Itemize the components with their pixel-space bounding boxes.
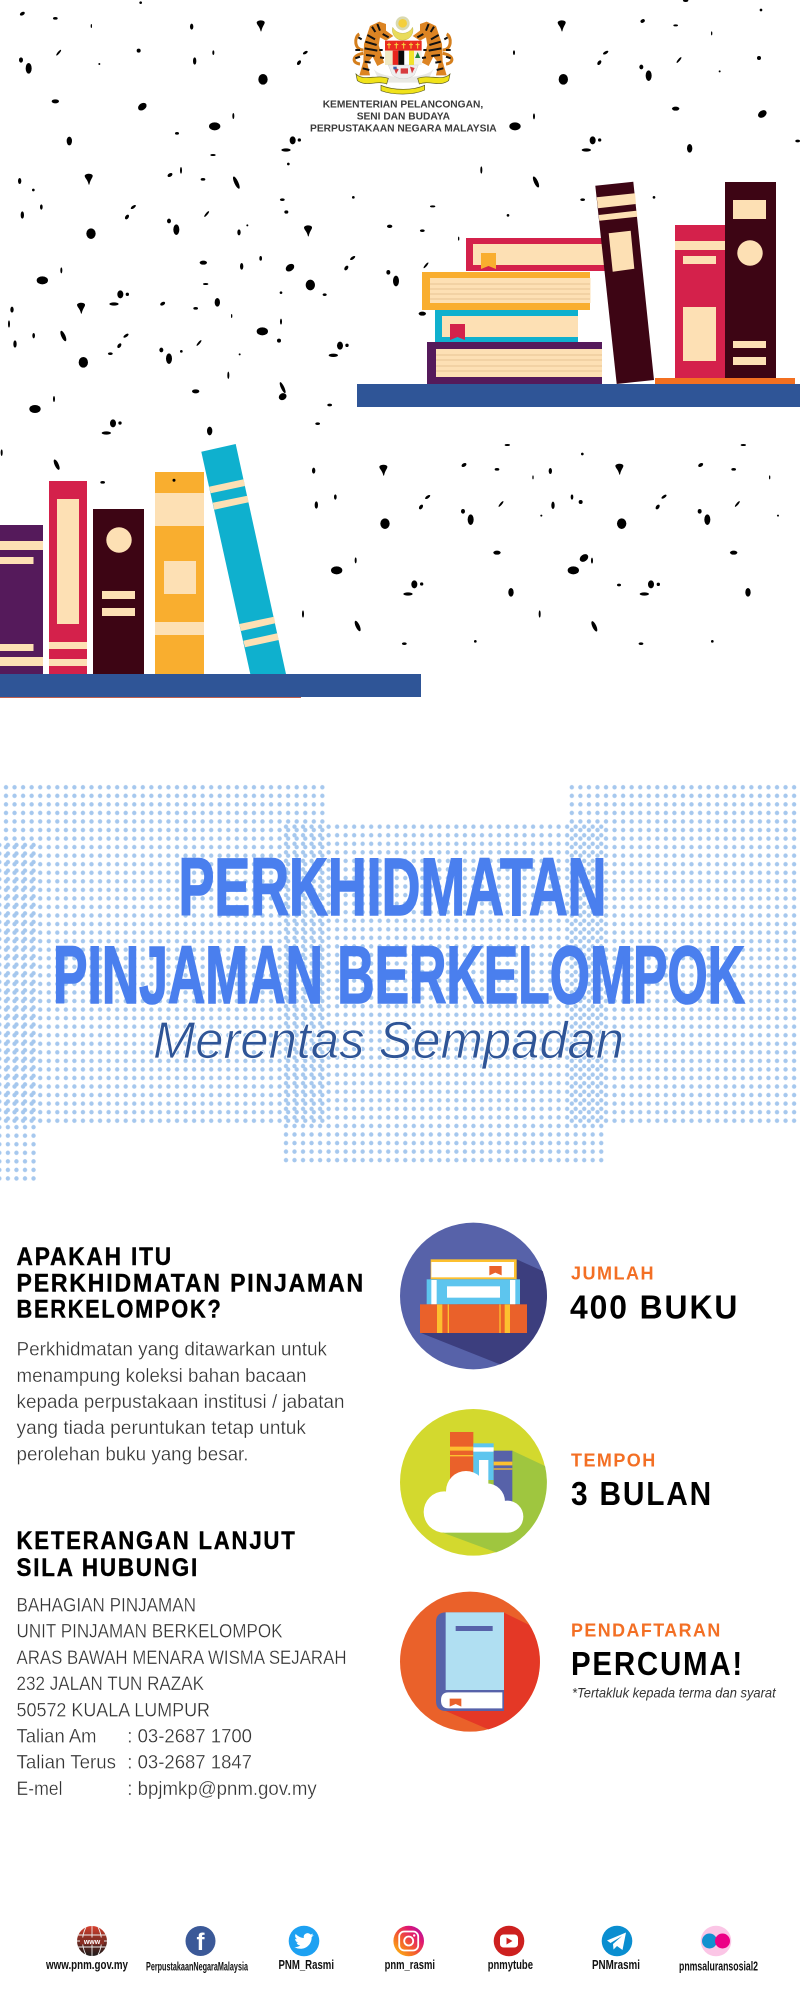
- text block: contact details: Talian Terus: [16, 1752, 116, 1774]
- heading: what is the service: PERKHIDMATAN PINJAMAN: [16, 1270, 365, 1298]
- label: twitter: PNM_Rasmi: [278, 1958, 334, 1972]
- book: pink horizontal: [466, 238, 606, 271]
- book: teal tilted: [201, 444, 286, 674]
- logo: Malaysian coat of arms: [354, 16, 452, 94]
- text block: contact details: : 03-2687 1847: [127, 1752, 252, 1774]
- panel: dotted world-map backdrop: [0, 783, 800, 1182]
- text block: contact details: : bpjmkp@pnm.gov.my: [127, 1778, 317, 1800]
- label: telegram: PNMrasmi: [592, 1958, 640, 1972]
- book: teal horizontal: [435, 310, 578, 343]
- text block: contact details: E-mel: [16, 1778, 62, 1800]
- icon: cloud books circle: [400, 1409, 547, 1556]
- icon: book stack circle: [400, 1223, 547, 1369]
- logo: motto ribbon: [356, 74, 450, 94]
- book: dark upright: [725, 182, 776, 378]
- label: facebook: PerpustakaanNegaraMalaysia: [146, 1960, 248, 1974]
- illustration: bottom-left bookshelf: [0, 444, 421, 698]
- stat: registration free: *Tertakluk kepada terma dan syarat: [572, 1685, 777, 1701]
- logo caption: ministry and library: PERPUSTAKAAN NEGARA MALAYSIA: [310, 124, 497, 135]
- icon: single book circle: [400, 1592, 540, 1732]
- logo: right tiger: [413, 22, 452, 75]
- book: dark tilted: [595, 182, 654, 384]
- text block: contact details: ARAS BAWAH MENARA WISMA SEJARAH: [16, 1647, 346, 1669]
- book: purple horizontal: [427, 342, 602, 384]
- text block: contact details: BAHAGIAN PINJAMAN: [16, 1594, 196, 1616]
- text block: service description: menampung koleksi bahan bacaan: [16, 1365, 306, 1387]
- icon: youtube: [494, 1926, 524, 1956]
- title: [53, 842, 745, 1021]
- stat: total books: 400 BUKU: [570, 1289, 739, 1326]
- stat: registration free: PERCUMA!: [571, 1645, 744, 1682]
- heading: what is the service: APAKAH ITU: [16, 1243, 173, 1271]
- stat: total books: [570, 1262, 739, 1326]
- text block: contact details: Talian Am: [16, 1726, 96, 1748]
- heading: further information: KETERANGAN LANJUT: [16, 1527, 296, 1555]
- subtitle: Merentas Sempadan: [153, 1012, 624, 1070]
- logo caption: ministry and library: SENI DAN BUDAYA: [357, 112, 450, 123]
- stat: total books: JUMLAH: [571, 1262, 655, 1283]
- label: instagram: pnm_rasmi: [385, 1958, 435, 1972]
- heading: what is the service: BERKELOMPOK?: [16, 1296, 222, 1324]
- shelf: [0, 674, 421, 697]
- icon: twitter: [289, 1926, 319, 1956]
- text block: service description: [16, 1338, 344, 1466]
- book: yellow horizontal: [422, 272, 590, 310]
- logo crest: crescent and star: [392, 16, 413, 40]
- text block: service description: kepada perpustakaan institusi / jabatan: [16, 1391, 344, 1413]
- heading: further information: SILA HUBUNGI: [16, 1554, 199, 1582]
- stat: registration free: PENDAFTARAN: [571, 1620, 722, 1641]
- icon: website globe: [77, 1926, 107, 1956]
- stat: loan period: TEMPOH: [571, 1450, 657, 1471]
- icon: facebook: [186, 1926, 216, 1956]
- stat: loan period: 3 BULAN: [571, 1475, 713, 1512]
- icon: website globe: www: [83, 1939, 101, 1946]
- logo: shield: [373, 41, 434, 83]
- orange base: [655, 378, 795, 384]
- book: orange upright: [155, 472, 204, 674]
- footer: social links: [45, 1926, 758, 1974]
- logo caption: ministry and library: KEMENTERIAN PELANCONGAN,: [323, 100, 483, 111]
- logo: left tiger: [354, 22, 393, 75]
- text block: contact details: : 03-2687 1700: [127, 1726, 252, 1748]
- text block: contact details: UNIT PINJAMAN BERKELOMPOK: [16, 1620, 282, 1642]
- label: flickr: pnmsaluransosial2: [679, 1960, 758, 1974]
- icon: telegram: [602, 1926, 632, 1956]
- ink splatter pattern: [1, 0, 800, 645]
- text block: contact details: [16, 1594, 346, 1800]
- label: website: www.pnm.gov.my: [45, 1958, 128, 1972]
- book: dark upright: [93, 509, 144, 674]
- illustration: top-right bookshelf: [357, 182, 800, 407]
- icon: flickr: [701, 1926, 731, 1956]
- stat: loan period: [571, 1450, 713, 1512]
- text block: contact details: 50572 KUALA LUMPUR: [16, 1700, 210, 1722]
- book: purple upright: [0, 525, 43, 674]
- logo caption: ministry and library: [310, 100, 497, 135]
- text block: service description: yang tiada peruntukan tetap untuk: [16, 1417, 306, 1439]
- icon: facebook: f: [196, 1929, 206, 1956]
- text block: service description: Perkhidmatan yang ditawarkan untuk: [16, 1338, 327, 1360]
- label: youtube: pnmytube: [488, 1958, 533, 1972]
- stat: registration free: [571, 1620, 777, 1701]
- shelf: [357, 384, 800, 407]
- text block: contact details: 232 JALAN TUN RAZAK: [16, 1673, 204, 1695]
- icon: instagram: [393, 1926, 424, 1956]
- book: red upright: [675, 225, 725, 378]
- heading: what is the service: [16, 1243, 365, 1324]
- book: pink upright: [49, 481, 87, 674]
- text block: service description: perolehan buku yang besar.: [16, 1444, 248, 1466]
- heading: further information: [16, 1527, 296, 1582]
